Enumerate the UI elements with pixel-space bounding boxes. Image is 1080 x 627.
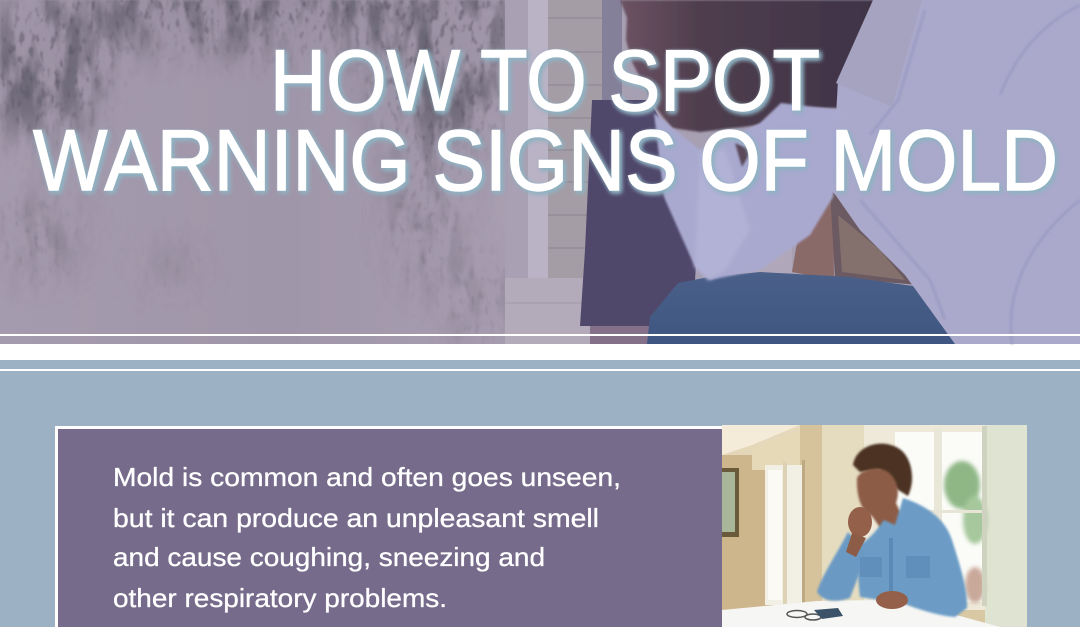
photo: woman coughing at a table: [722, 425, 1027, 627]
neck and face: [857, 469, 905, 535]
shirt placket and folds: [860, 5, 1080, 344]
sleeve: [654, 103, 840, 280]
raised fist: [848, 507, 872, 537]
intro text: [113, 462, 621, 613]
collar: [836, 0, 922, 107]
mirror on wall: [722, 468, 739, 537]
title: HOW TO SPOT: [270, 33, 820, 129]
blue content section: [0, 360, 1080, 627]
intro text: but it can produce an unpleasant smell: [113, 503, 599, 533]
white table: [722, 600, 1000, 627]
mold-stained wall: [0, 0, 520, 344]
title: [33, 33, 1058, 209]
right window: [895, 426, 987, 606]
left sleeve: [817, 532, 866, 601]
sleeve gap: [735, 143, 752, 167]
jeans: [647, 272, 955, 344]
lower hand: [876, 591, 908, 609]
hair: [853, 444, 912, 496]
intro text: and cause coughing, sneezing and: [113, 542, 545, 572]
chair: [740, 190, 920, 285]
head and neck: [620, 0, 880, 132]
hero photo: moldy wall and worried man: [0, 0, 1080, 344]
title: HOW TO SPOT: [270, 33, 820, 129]
shirt body: [832, 0, 1080, 344]
woman: [817, 444, 967, 617]
room background: [722, 425, 1027, 627]
window frame and brick: [505, 0, 1080, 344]
glasses and phone: [787, 608, 843, 620]
intro text panel: [55, 426, 722, 627]
curtain: [580, 100, 700, 326]
left french door: [765, 460, 805, 605]
hero rule: [0, 334, 1080, 336]
intro text: Mold is common and often goes unseen,: [113, 462, 621, 492]
pockets: [860, 556, 930, 578]
intro text: other respiratory problems.: [113, 583, 447, 613]
denim shirt: [858, 498, 967, 617]
